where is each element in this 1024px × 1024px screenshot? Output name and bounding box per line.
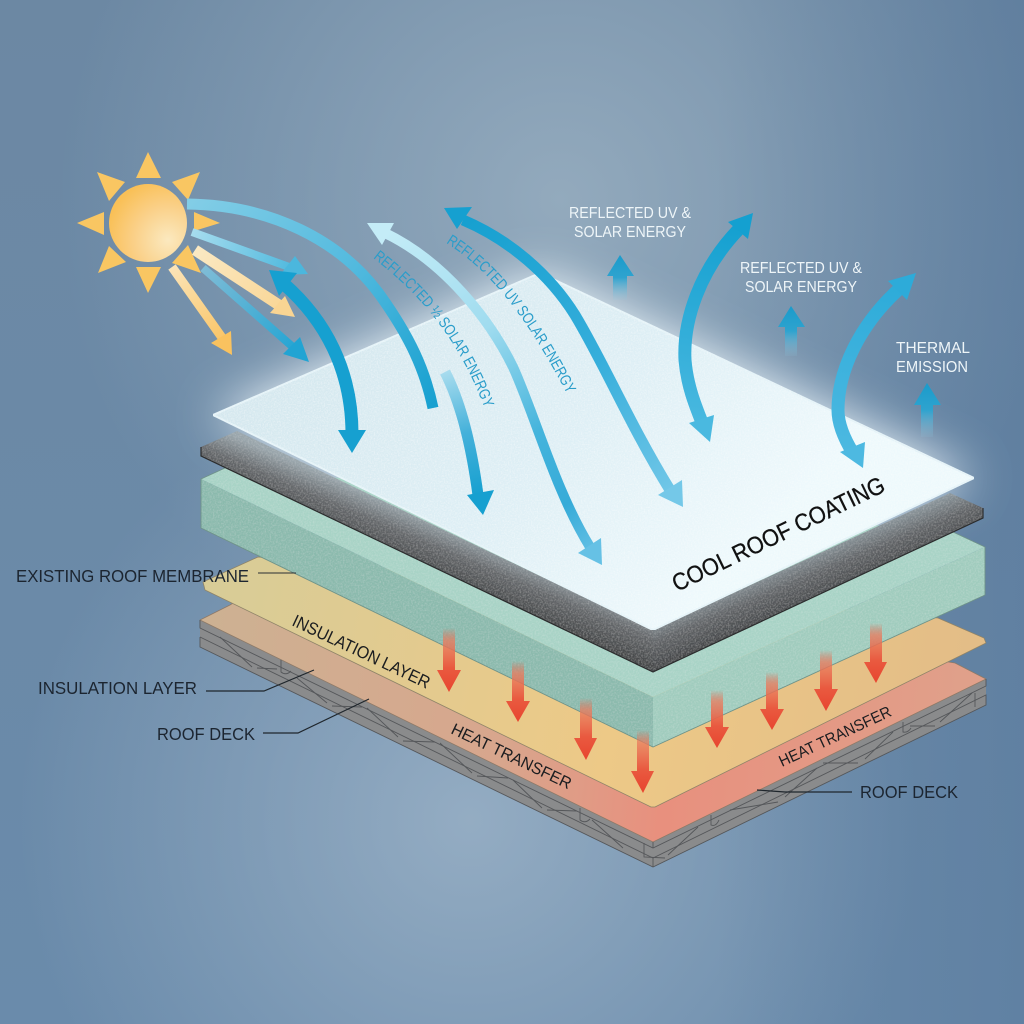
panel: cool roof coating surface — [213, 273, 974, 630]
callout: reflected uv 1: SOLAR ENERGY — [574, 224, 686, 241]
arrow: incoming continuation — [445, 372, 494, 515]
layer: roof deck — [200, 560, 986, 867]
callout: reflected uv 2 — [740, 260, 862, 296]
callout: thermal emission: EMISSION — [896, 359, 968, 376]
arrow: double headed arc right — [838, 273, 916, 468]
callout: reflected uv 1 — [569, 205, 691, 241]
callout: reflected uv 2: REFLECTED UV & — [740, 260, 862, 277]
arrow: solar ray yellow lower — [172, 267, 232, 355]
callout: thermal emission: THERMAL — [896, 340, 970, 357]
label: insulation layer: INSULATION LAYER — [38, 678, 197, 698]
curved label: reflected uv solar energy: REFLECTED UV SOLAR ENERGY — [446, 234, 576, 391]
arrow: up 1 — [607, 255, 634, 300]
arrow: solar ray yellow upper — [195, 250, 295, 317]
label: insulation layer — [38, 670, 314, 698]
arrow: short solar ray blue — [192, 232, 308, 275]
arrow: solar ray blue lower — [203, 268, 309, 362]
layer: existing roof membrane — [201, 468, 985, 747]
label: heat transfer right: HEAT TRANSFER — [777, 704, 894, 771]
layer: dark base coat — [201, 431, 983, 672]
arrow: double headed reflected arc near sun — [269, 270, 366, 453]
label: existing roof membrane: EXISTING ROOF MEMBRANE — [16, 566, 249, 586]
arrow: blue wavy reflected energy — [444, 207, 683, 507]
callout: thermal emission — [896, 340, 970, 376]
arrow: incoming solar arc — [187, 204, 433, 408]
layer: insulation board — [203, 557, 986, 807]
arrow: pale wavy reflected energy — [367, 223, 602, 565]
heading: cool roof coating: COOL ROOF COATING — [668, 472, 889, 597]
coating glow — [213, 273, 975, 629]
curved label: reflected solar energy: REFLECTED ½ SOLAR ENERGY — [374, 250, 494, 405]
label: roof deck left — [157, 699, 369, 744]
heat transfer arrows — [437, 623, 887, 793]
label: roof deck left: ROOF DECK — [157, 724, 255, 744]
label: insulation layer on board: INSULATION LAYER — [289, 611, 434, 692]
arrow: up 3 — [914, 383, 941, 437]
label: heat transfer left: HEAT TRANSFER — [448, 720, 574, 793]
callout: reflected uv 2: SOLAR ENERGY — [745, 279, 857, 296]
callout: reflected uv 1: REFLECTED UV & — [569, 205, 691, 222]
icon: sun — [77, 152, 220, 293]
arrow: double headed arc centre right — [685, 213, 753, 442]
label: roof deck right: ROOF DECK — [860, 782, 958, 802]
arrow: up 2 — [778, 306, 805, 356]
